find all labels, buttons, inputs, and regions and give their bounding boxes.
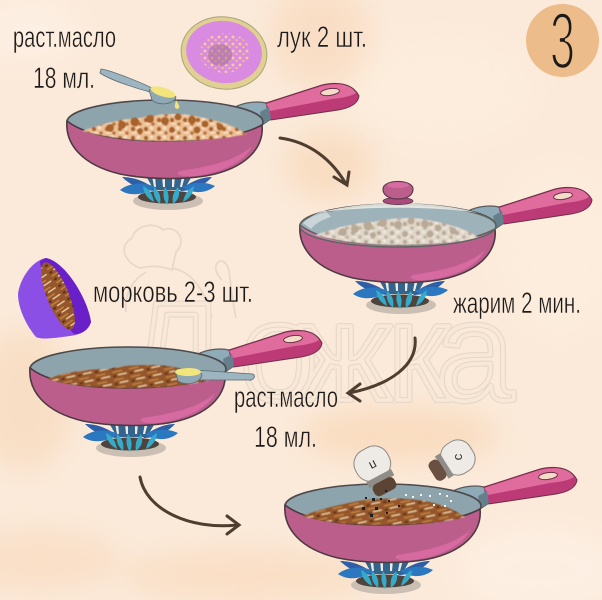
step number badge <box>526 0 599 85</box>
label: oil 1: раст.масло <box>13 21 116 54</box>
carrot in pan 3 <box>47 365 210 388</box>
salt shaker <box>405 435 480 507</box>
lid <box>300 182 496 247</box>
plate of onion <box>176 11 272 95</box>
label: oil 2: 18 мл. <box>254 421 317 454</box>
label: onion: лук 2 шт. <box>277 21 367 54</box>
onion in pan 2 <box>315 218 480 245</box>
arrow 3 <box>140 477 239 534</box>
pepper shaker: п <box>367 457 380 474</box>
watermark wordmark: Ложка <box>128 273 514 430</box>
label: oil 1: 18 мл. <box>33 62 95 95</box>
label: oil 2 <box>234 381 338 454</box>
bowl of carrot <box>18 258 91 339</box>
onion in pan 1 <box>82 114 247 141</box>
pan 3 with carrot <box>30 330 322 457</box>
spoon with oil, pan 1 <box>100 69 179 109</box>
label: carrot: морковь 2-3 шт. <box>93 276 253 309</box>
watermark wordmark: Ложка <box>128 273 514 430</box>
carrot in pan 4 <box>302 498 465 525</box>
salt shaker: с <box>450 453 465 460</box>
pepper shaker <box>349 441 403 517</box>
pan 4 with carrot and spices <box>285 467 577 594</box>
watermark chef <box>124 225 236 318</box>
pan 1 with onion <box>67 83 359 210</box>
label: oil 2: раст.масло <box>234 381 338 414</box>
pan 2 with lid <box>300 182 592 314</box>
watermark: chef and brand <box>124 225 514 430</box>
arrow 2 <box>348 338 415 401</box>
arrow 1 <box>280 138 349 185</box>
spoon with oil, pan 3 <box>175 368 254 384</box>
label: oil 1 <box>13 21 116 95</box>
